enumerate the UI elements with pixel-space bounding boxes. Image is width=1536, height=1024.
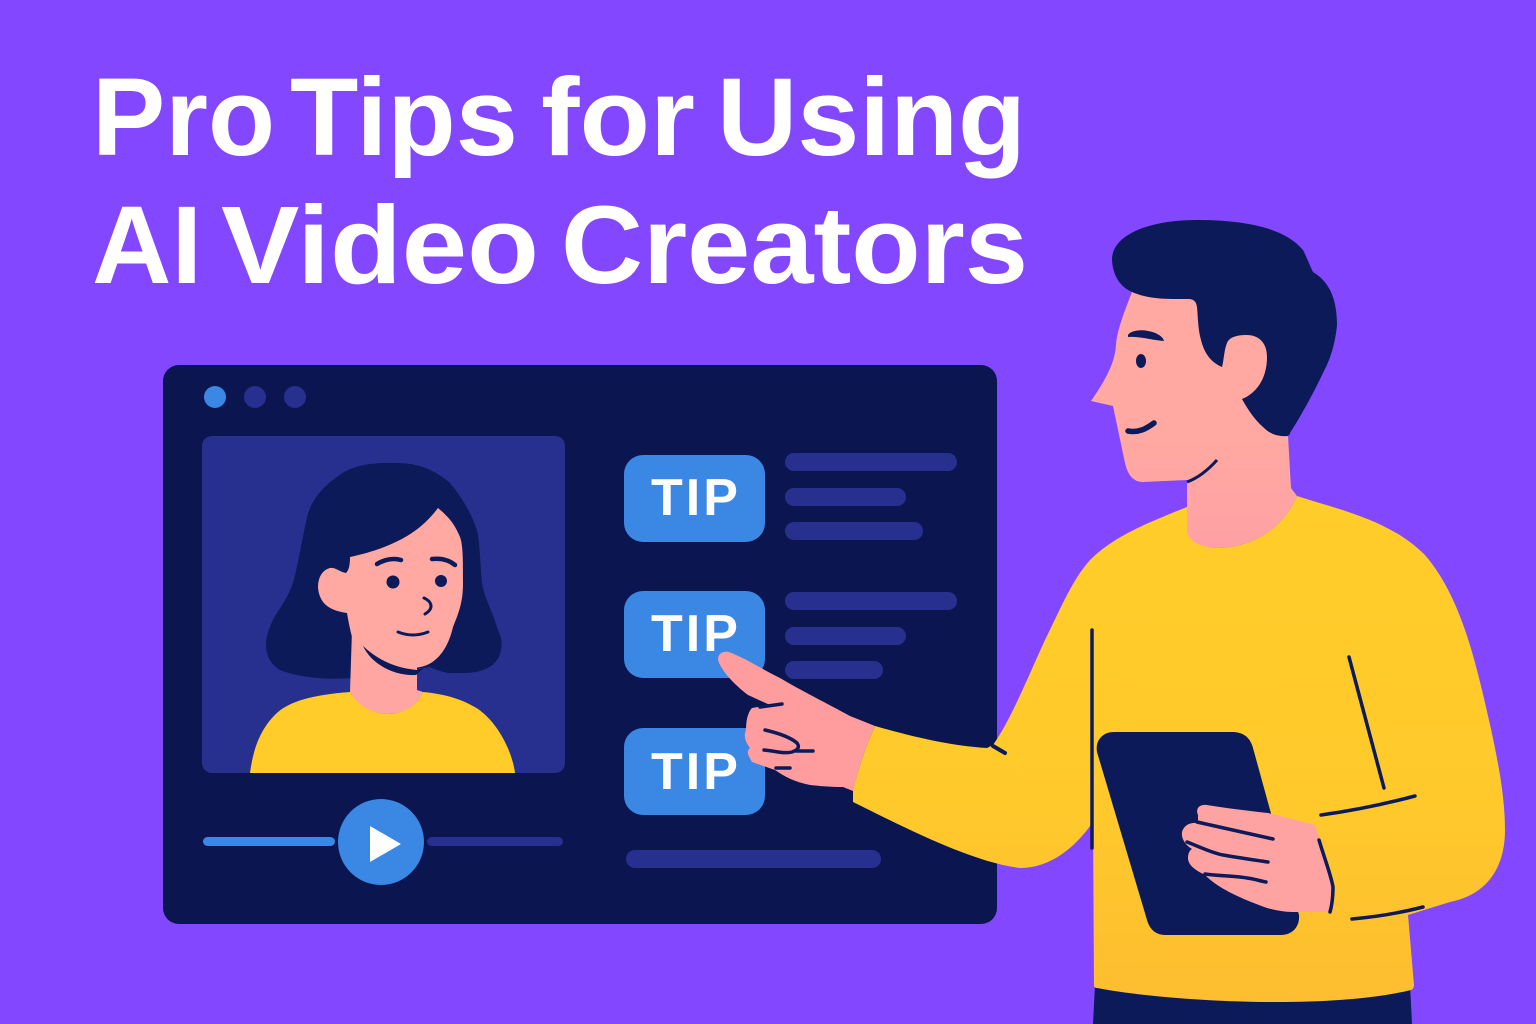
tip row 2 (624, 591, 957, 679)
man hair (1112, 220, 1337, 436)
panel: video app window (163, 365, 997, 924)
woman features (363, 559, 455, 675)
man trousers (1093, 985, 1412, 1024)
title: for (541, 56, 695, 179)
bottom text bar (626, 850, 881, 868)
holding hand (1182, 805, 1333, 912)
pointing hand (718, 652, 875, 791)
tip row 1 (624, 453, 957, 542)
video progress bar with play button (203, 799, 563, 885)
man sweater lines (993, 630, 1423, 919)
woman face (318, 508, 463, 668)
man face features (1128, 330, 1217, 482)
window dots (204, 386, 306, 408)
tip row 3: TIP (651, 743, 741, 801)
title (92, 56, 1028, 307)
man head (1091, 292, 1297, 548)
title: Video (221, 184, 539, 307)
tip row 3 (624, 728, 765, 815)
title: AI (92, 184, 202, 307)
title: Creators (561, 184, 1028, 307)
woman hair (266, 463, 502, 679)
title: Pro (92, 56, 275, 179)
tablet (1097, 732, 1299, 935)
tip row 2: TIP (651, 605, 741, 663)
title: Tips (290, 56, 518, 179)
woman sweater (250, 692, 515, 773)
man illustration (718, 220, 1505, 1024)
woman neck (350, 630, 423, 714)
man sweater (853, 496, 1505, 1002)
tip row 1: TIP (651, 469, 741, 527)
video thumbnail (202, 436, 565, 773)
title: Using (717, 56, 1026, 179)
